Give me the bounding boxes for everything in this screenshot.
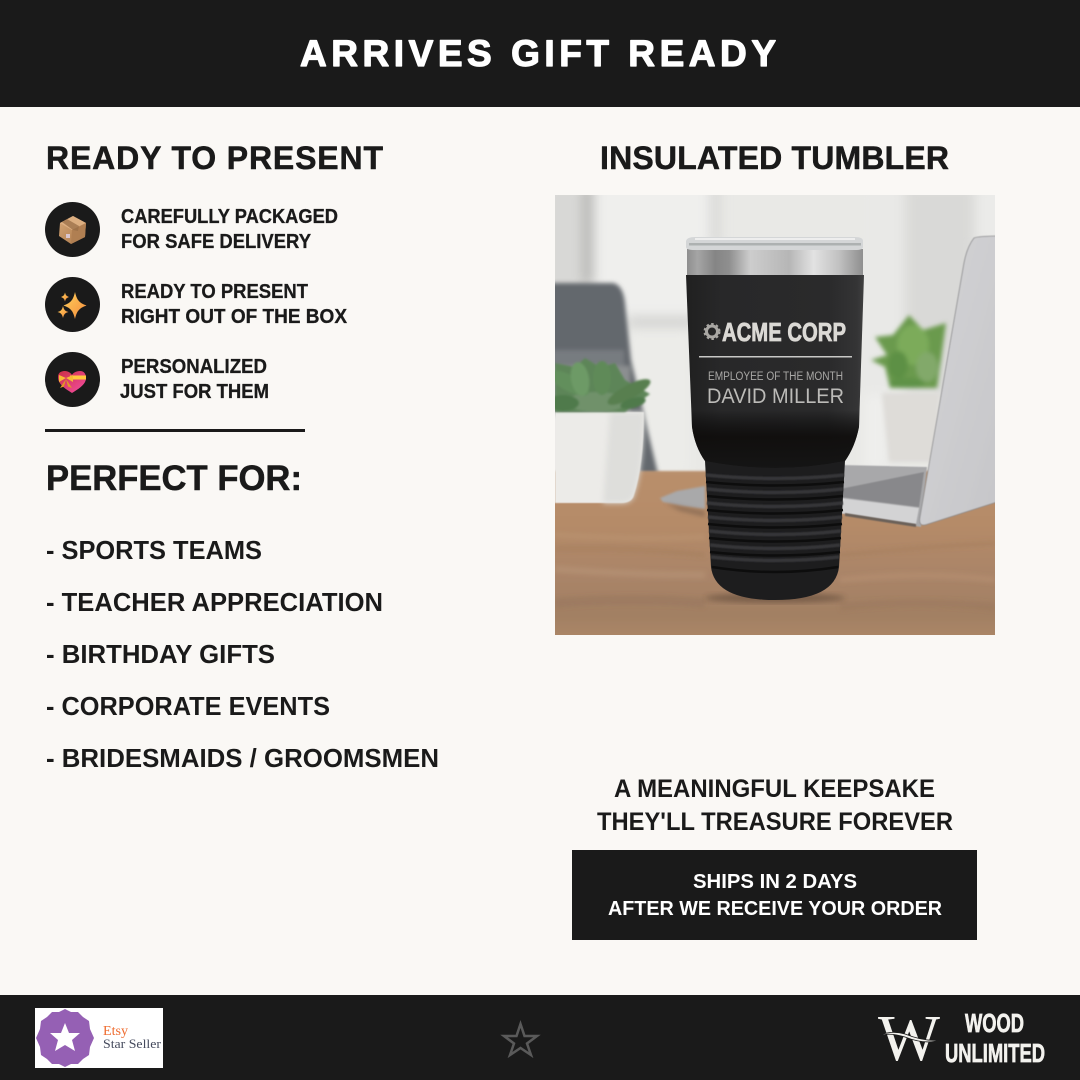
callout: shipping time <box>572 850 977 940</box>
tagline: keepsake: A MEANINGFUL KEEPSAKE <box>614 775 935 803</box>
tumbler shadow <box>705 593 845 603</box>
icon: gift heart <box>58 371 86 393</box>
list: occasions <box>46 535 439 773</box>
feature: personalized: PERSONALIZED <box>121 356 267 378</box>
badge: etsy star seller: Star Seller <box>103 1036 162 1051</box>
clear lid <box>686 237 863 250</box>
panel: ready to present <box>45 140 383 407</box>
badge: etsy star seller <box>35 1008 163 1068</box>
feature: personalized <box>45 352 269 407</box>
badge: etsy star seller: Etsy <box>103 1024 128 1039</box>
steel rim <box>687 249 863 275</box>
heading: perfect for: PERFECT FOR: <box>46 459 302 498</box>
left plant <box>546 358 653 503</box>
header banner <box>0 0 1080 107</box>
engraving: ACME CORP <box>722 317 846 347</box>
icon: outline star <box>504 1024 537 1055</box>
logo: wood unlimited: W <box>878 1002 941 1075</box>
right plant <box>871 315 946 462</box>
footer bar <box>0 995 1080 1080</box>
feature: ready right out of the box: RIGHT OUT OF THE BOX <box>121 306 348 328</box>
icon: sparkles <box>58 292 86 319</box>
product photo: tumbler on desk <box>545 185 1005 651</box>
feature: personalized: JUST FOR THEM <box>120 381 269 403</box>
feature: ready right out of the box <box>45 277 348 332</box>
heading: insulated tumbler: INSULATED TUMBLER <box>600 140 949 176</box>
logo: wood unlimited: WOOD <box>965 1008 1024 1038</box>
panel: perfect for <box>46 459 439 773</box>
engraving <box>699 322 852 403</box>
ribs base <box>705 461 845 600</box>
tagline: keepsake: THEY'LL TREASURE FOREVER <box>597 808 953 836</box>
list: occasions: - SPORTS TEAMS <box>46 535 262 565</box>
feature: carefully packaged: FOR SAFE DELIVERY <box>121 231 312 253</box>
engraving: EMPLOYEE OF THE MONTH <box>708 371 843 383</box>
list: occasions: - BRIDESMAIDS / GROOMSMEN <box>46 743 439 773</box>
tumbler <box>686 237 864 600</box>
upper body <box>686 275 864 468</box>
laptop <box>660 236 1000 527</box>
heading: ready to present: READY TO PRESENT <box>46 140 383 176</box>
engraving: DAVID MILLER <box>707 385 844 408</box>
list: occasions: - CORPORATE EVENTS <box>46 691 330 721</box>
feature: carefully packaged <box>45 202 338 257</box>
blurred window background <box>555 195 974 392</box>
icon: purple badge with star <box>36 1009 94 1067</box>
callout: shipping time: SHIPS IN 2 DAYS <box>693 871 857 893</box>
tagline: keepsake <box>597 775 953 836</box>
title: ARRIVES GIFT READY <box>300 33 776 74</box>
desk <box>555 470 995 635</box>
list: occasions: - TEACHER APPRECIATION <box>46 587 383 617</box>
feature: carefully packaged: CAREFULLY PACKAGED <box>121 206 338 228</box>
chair <box>550 283 658 474</box>
list: occasions: - BIRTHDAY GIFTS <box>46 639 275 669</box>
logo: wood unlimited <box>878 1002 1045 1075</box>
feature: ready right out of the box: READY TO PRESENT <box>121 281 308 303</box>
icon: package box <box>59 216 86 244</box>
callout: shipping time: AFTER WE RECEIVE YOUR ORDER <box>608 898 943 920</box>
